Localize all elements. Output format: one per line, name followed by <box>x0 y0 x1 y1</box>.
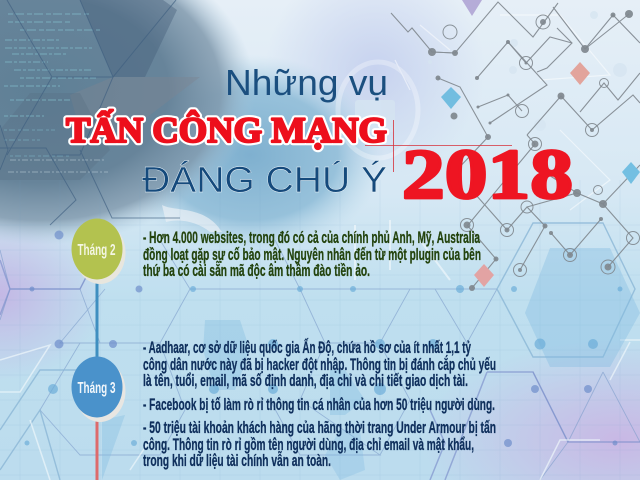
dark top hexagons <box>0 0 180 225</box>
faint grid <box>0 180 640 480</box>
text block: Tháng 3 <box>143 338 496 470</box>
node: Tháng 2 <box>72 218 126 284</box>
lower hexagon network <box>0 240 640 480</box>
title line: TẤN CÔNG MẠNG: TẤN CÔNG MẠNG <box>66 110 387 150</box>
timeline connector: blue <box>96 276 98 361</box>
timeline connector: red <box>96 412 98 480</box>
node: Tháng 3: Tháng 3 <box>78 380 116 397</box>
network nodes <box>30 230 618 447</box>
code texture: dashes only <box>4 14 108 172</box>
title line: Những vụ: Những vụ <box>225 62 388 103</box>
title <box>66 62 573 214</box>
text block: Tháng 3: trong khi dữ liệu tài chính vẫn an toàn. <box>143 451 331 470</box>
translucent hexagons <box>102 248 640 480</box>
year 2018: 2018 <box>402 136 573 214</box>
text block: Tháng 2: thứ ba có cài sẵn mã độc âm thầm đào tiền ảo. <box>143 260 370 280</box>
text block: Tháng 2 <box>143 229 481 280</box>
node: Tháng 2: Tháng 2 <box>78 242 116 259</box>
title line: TẤN CÔNG MẠNG: TẤN CÔNG MẠNG <box>66 110 387 150</box>
red cross lines <box>365 120 512 172</box>
pale lock and circuit behind <box>338 15 610 280</box>
node: Tháng 3 <box>72 356 126 422</box>
diamonds <box>441 0 640 287</box>
title line: ĐÁNG CHÚ Ý: ĐÁNG CHÚ Ý <box>142 159 387 200</box>
circuit lines <box>391 2 640 288</box>
